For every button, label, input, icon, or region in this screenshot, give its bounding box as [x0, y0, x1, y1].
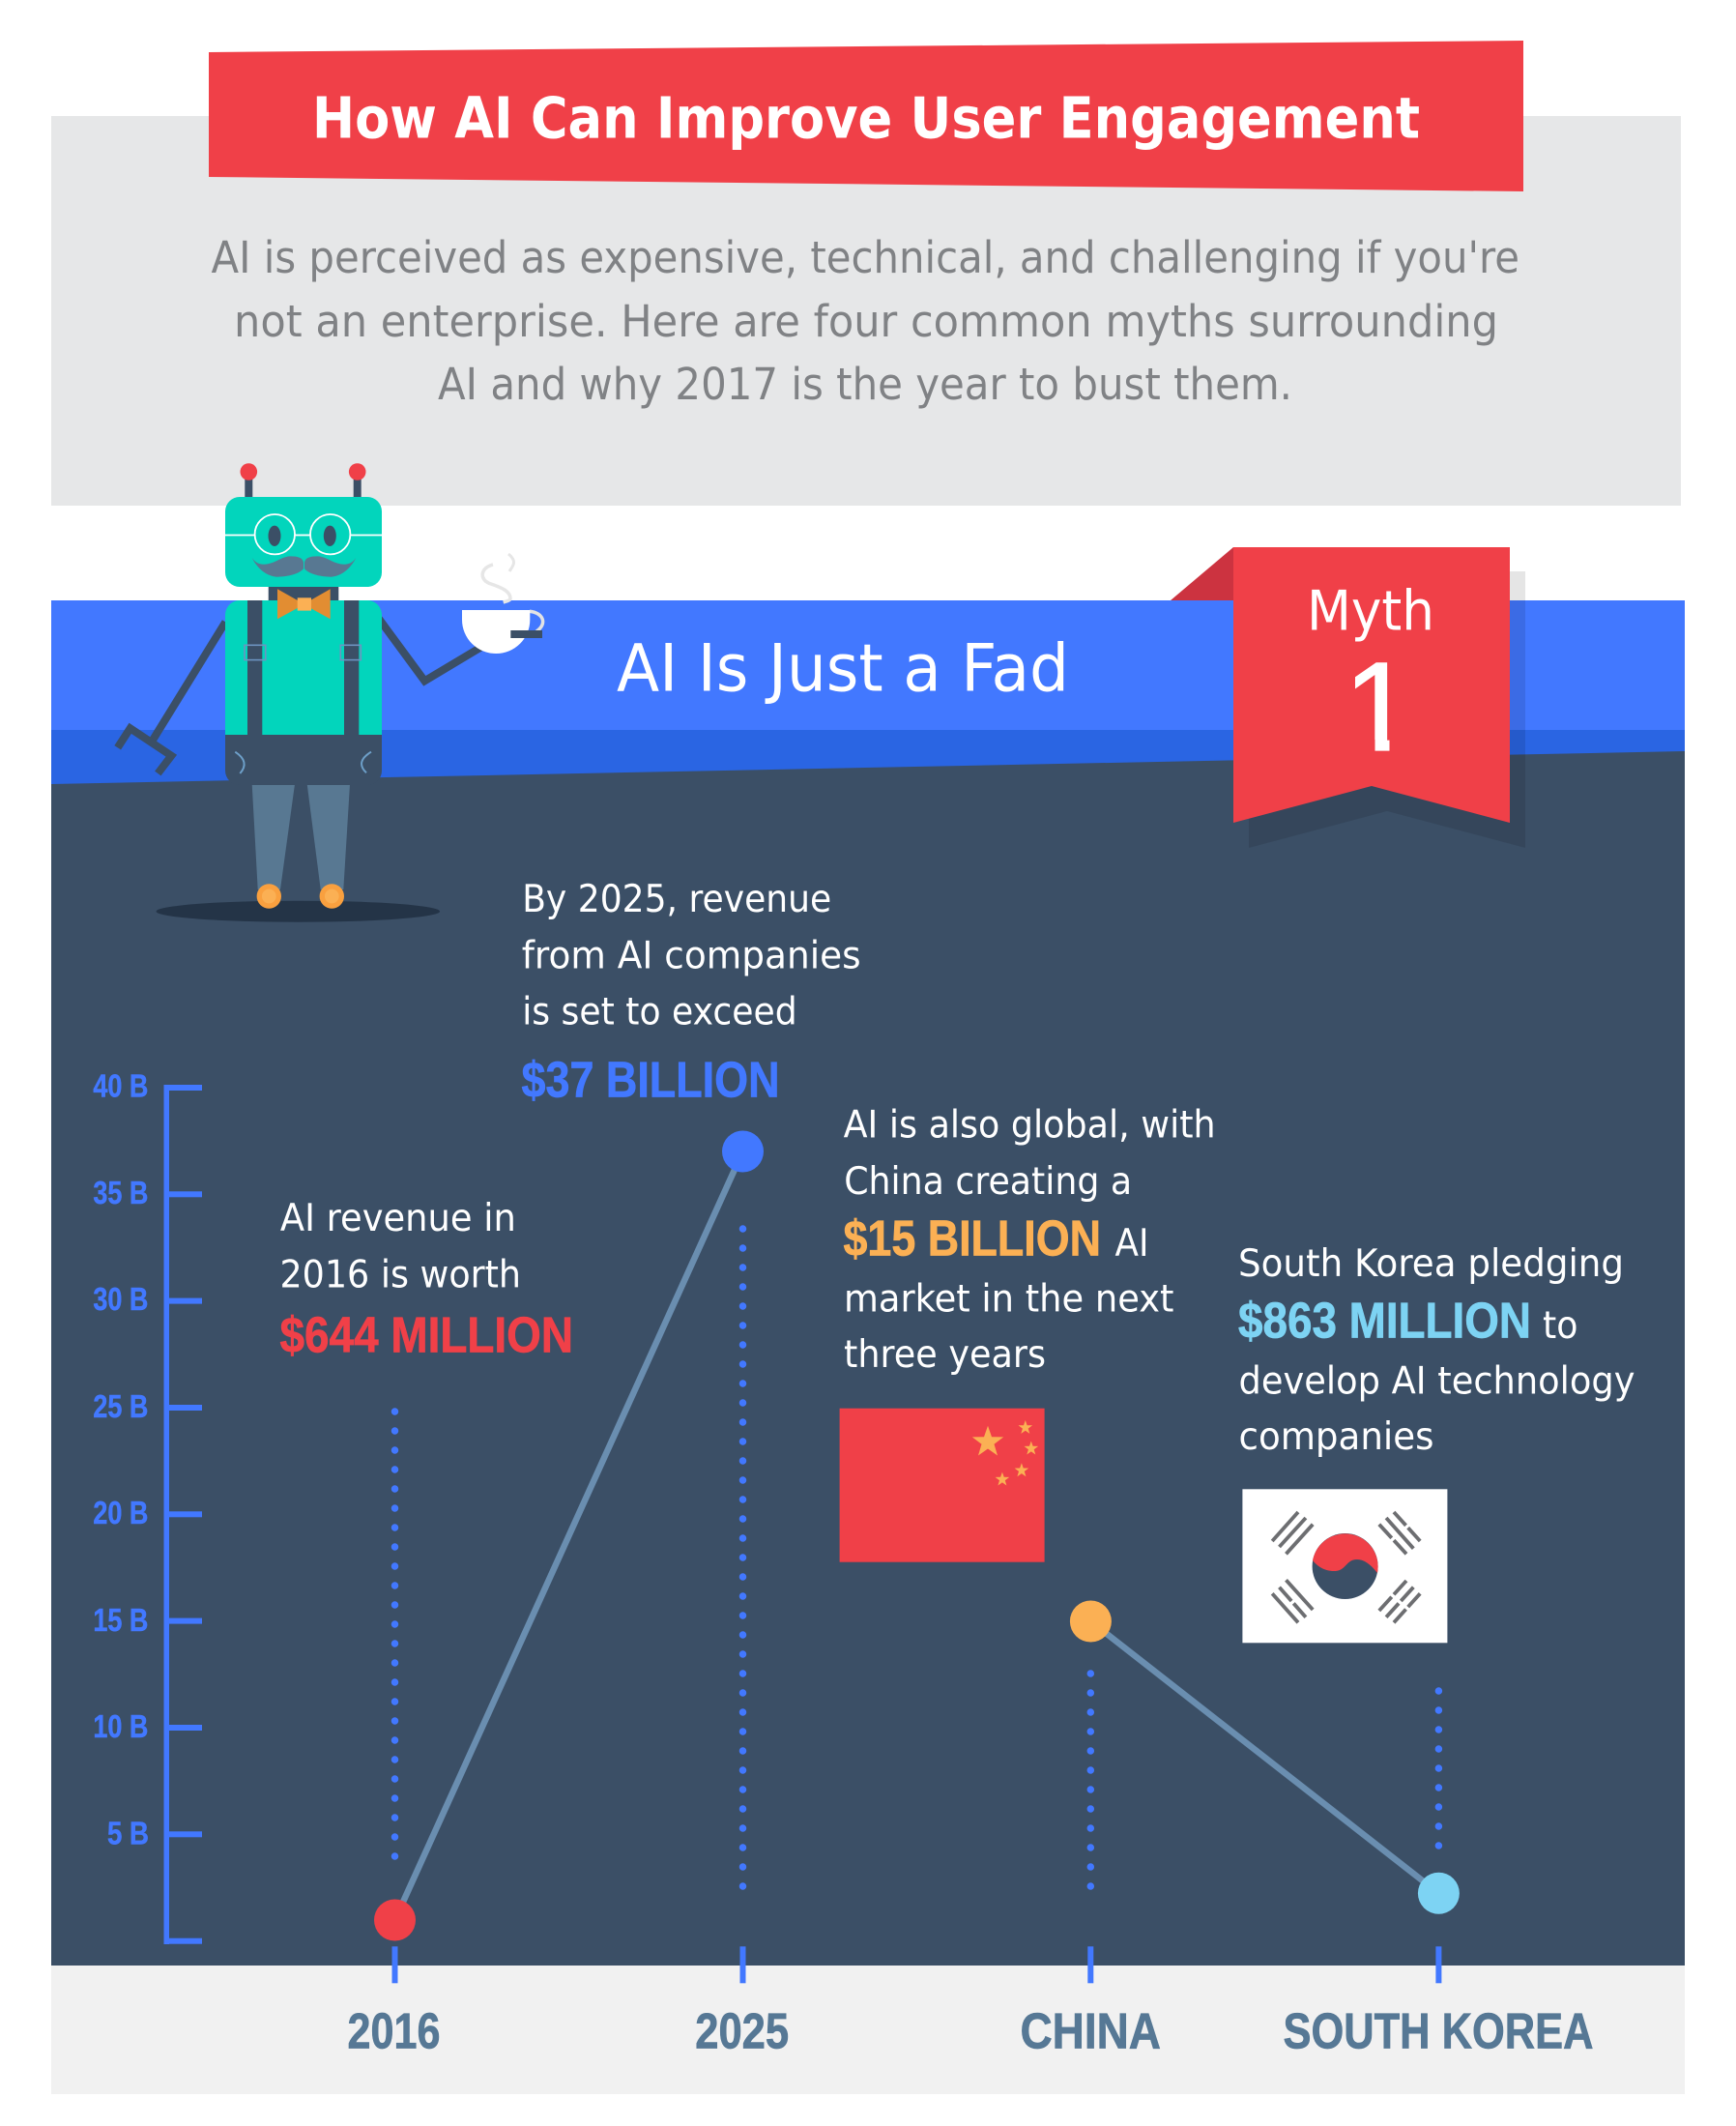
intro text: not an enterprise. Here are four common myths surrounding [234, 296, 1498, 347]
y axis labels: 35 B [93, 1175, 148, 1210]
y axis labels: 25 B [93, 1388, 148, 1424]
intro text: AI and why 2017 is the year to bust them. [438, 359, 1292, 410]
y axis labels: 40 B [93, 1067, 148, 1104]
ribbon label: Myth [1307, 580, 1434, 644]
y axis labels: 20 B [93, 1495, 148, 1530]
panel: intro background [51, 116, 1681, 506]
text block: China: three years [844, 1333, 1046, 1377]
y axis labels: 15 B [93, 1602, 148, 1638]
title: How AI Can Improve User Engagement [312, 85, 1420, 151]
ribbon number: 1 [1344, 635, 1414, 777]
chart: data points [374, 1131, 1460, 1941]
robot neck [269, 587, 338, 601]
robot antennas [240, 463, 366, 499]
text block: 2025 revenue: By 2025, revenue [522, 878, 831, 921]
text block: China: market in the next [844, 1278, 1173, 1321]
text block: South Korea: to [1543, 1304, 1577, 1348]
text block: China: AI [1115, 1222, 1148, 1266]
text block: 2016 revenue [280, 1197, 573, 1363]
robot head [225, 497, 382, 587]
icon: robot [118, 463, 543, 922]
y axis labels: 10 B [93, 1708, 148, 1744]
myth ribbon [1171, 547, 1525, 848]
myth heading: AI Is Just a Fad [617, 630, 1069, 708]
panel: footer strip [51, 1966, 1685, 2094]
robot feet [257, 884, 344, 909]
text block: China [843, 1104, 1216, 1377]
chart: x axis labels: 2025 [695, 2003, 789, 2059]
intro text: AI is perceived as expensive, technical, and challenging if you're [211, 232, 1519, 283]
chart: x axis labels [348, 2003, 1593, 2059]
intro text [211, 232, 1519, 410]
text block: China: $15 BILLION [843, 1210, 1101, 1267]
y axis labels: 5 B [107, 1816, 149, 1851]
chart: x axis labels: 2016 [348, 2003, 441, 2059]
title banner [209, 41, 1523, 191]
text block: China: China creating a [844, 1160, 1132, 1204]
text block: 2016 revenue: 2016 is worth [280, 1253, 521, 1297]
robot body [225, 600, 382, 785]
y axis labels [93, 1067, 149, 1851]
robot bow tie [277, 589, 331, 619]
text block: 2016 revenue: AI revenue in [280, 1197, 516, 1240]
text block: South Korea: develop AI technology [1239, 1359, 1635, 1404]
robot arms [118, 619, 483, 773]
robot legs [252, 784, 350, 889]
chart: x axis labels: CHINA [1021, 2003, 1161, 2059]
chart: dotted guides [394, 1229, 1438, 1887]
text block: 2016 revenue: $644 MILLION [280, 1307, 573, 1363]
text block: 2025 revenue: is set to exceed [522, 990, 797, 1034]
icon: South Korea flag [1242, 1489, 1447, 1643]
robot shadow [157, 901, 440, 922]
icon: coffee cup [462, 554, 543, 654]
text block: 2025 revenue: $37 BILLION [522, 1052, 779, 1108]
text block: 2025 revenue [522, 878, 861, 1108]
chart: line segments [394, 1151, 1438, 1920]
text block: South Korea [1238, 1242, 1635, 1459]
text block: South Korea: $863 MILLION [1238, 1294, 1531, 1350]
text block: South Korea: companies [1239, 1415, 1434, 1459]
text block: 2025 revenue: from AI companies [522, 934, 861, 978]
chart: x axis labels: SOUTH KOREA [1284, 2003, 1593, 2059]
chart: x axis ticks [392, 1946, 1441, 1983]
text block: South Korea: South Korea pledging [1238, 1242, 1624, 1286]
icon: China flag [840, 1409, 1045, 1562]
chart: y axis [93, 1067, 202, 1944]
panel: myth header band [51, 600, 1685, 788]
y axis labels: 30 B [93, 1281, 148, 1317]
text block: China: AI is also global, with [844, 1104, 1216, 1147]
panel: chart background [51, 751, 1685, 1966]
